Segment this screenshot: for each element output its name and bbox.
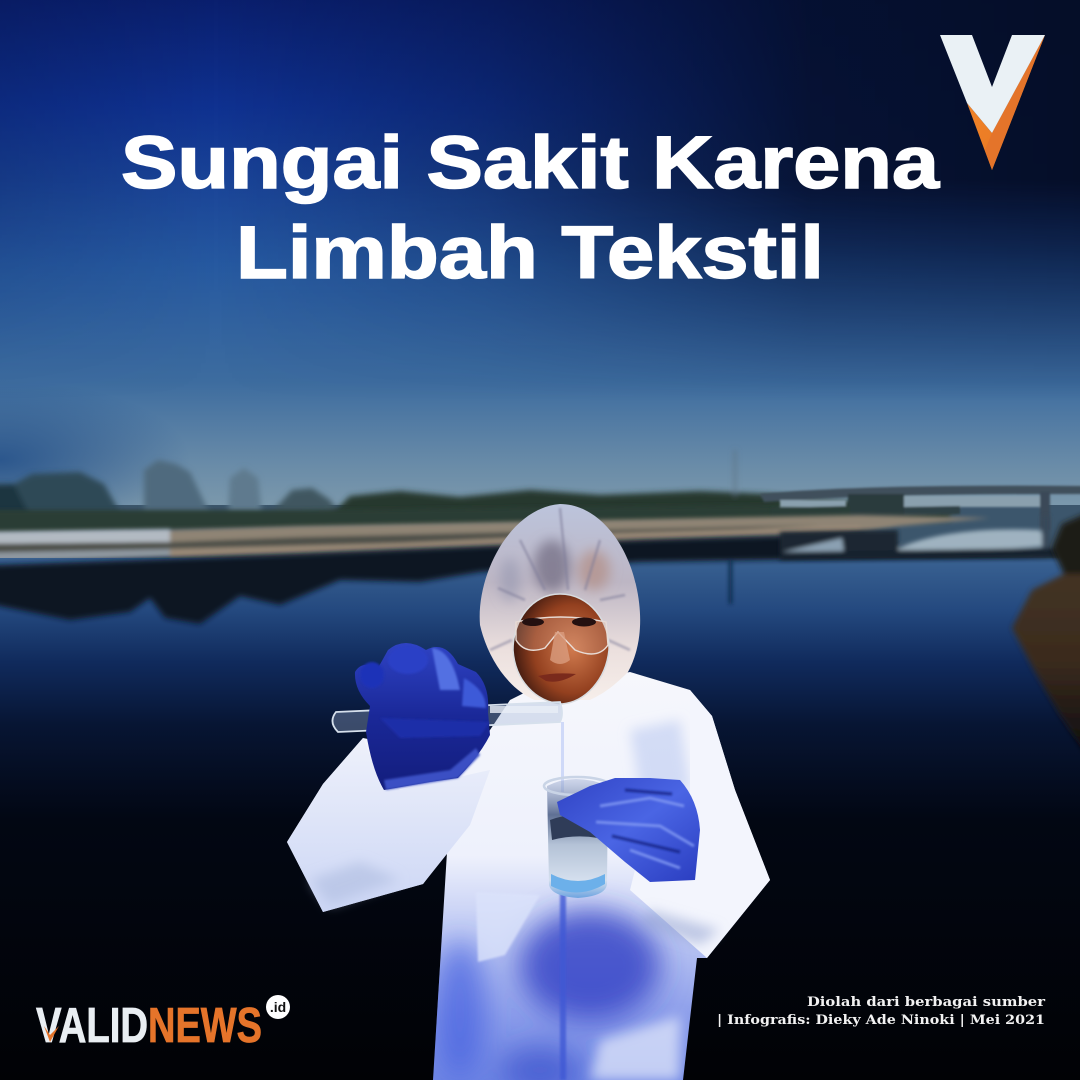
source credit: | Infografis: Dieky Ade Ninoki | Mei 2021 [717,1013,1045,1028]
pouring water stream [561,722,564,792]
hood folds [490,508,630,650]
mouth [538,673,576,682]
right blue glove [557,778,700,882]
logo: id badge: .id [270,999,286,1015]
river bank [0,515,990,563]
title: Sungai Sakit Karena [121,121,940,204]
logo: id badge [266,995,290,1019]
bridge [760,486,1080,530]
sky background [0,0,1080,540]
scientist figure [287,504,770,1080]
test tube [332,702,562,732]
hood shading [500,540,610,602]
right sleeve [630,690,770,958]
distant tree line [0,450,950,520]
left blue glove [355,643,490,790]
logo: Validnews wordmark: VALID [36,999,148,1053]
title [121,121,940,294]
source credit: Diolah dari berbagai sumber [807,995,1045,1010]
grass strip [0,504,960,534]
title: Limbah Tekstil [236,211,824,294]
safety goggles [516,617,608,664]
logo: wordmark V accent [44,1026,59,1042]
glass beaker [544,777,610,898]
far ground band [0,505,1080,565]
logo: V mark [940,35,1045,170]
bridge reflection [729,516,1062,604]
sleeve shading [310,862,720,945]
river water [0,558,1080,1080]
hood [480,504,640,700]
suit fold highlight [476,892,540,962]
source credit [717,995,1045,1028]
logo: Validnews wordmark: NEWS [148,999,262,1053]
face [513,594,609,704]
suit zipper [560,890,566,1080]
water reflections [0,534,1060,624]
logo: Validnews wordmark [36,995,290,1053]
suit shading [434,720,690,1080]
suit body [287,672,770,1080]
left sleeve [287,738,490,912]
right shore [1012,512,1080,760]
